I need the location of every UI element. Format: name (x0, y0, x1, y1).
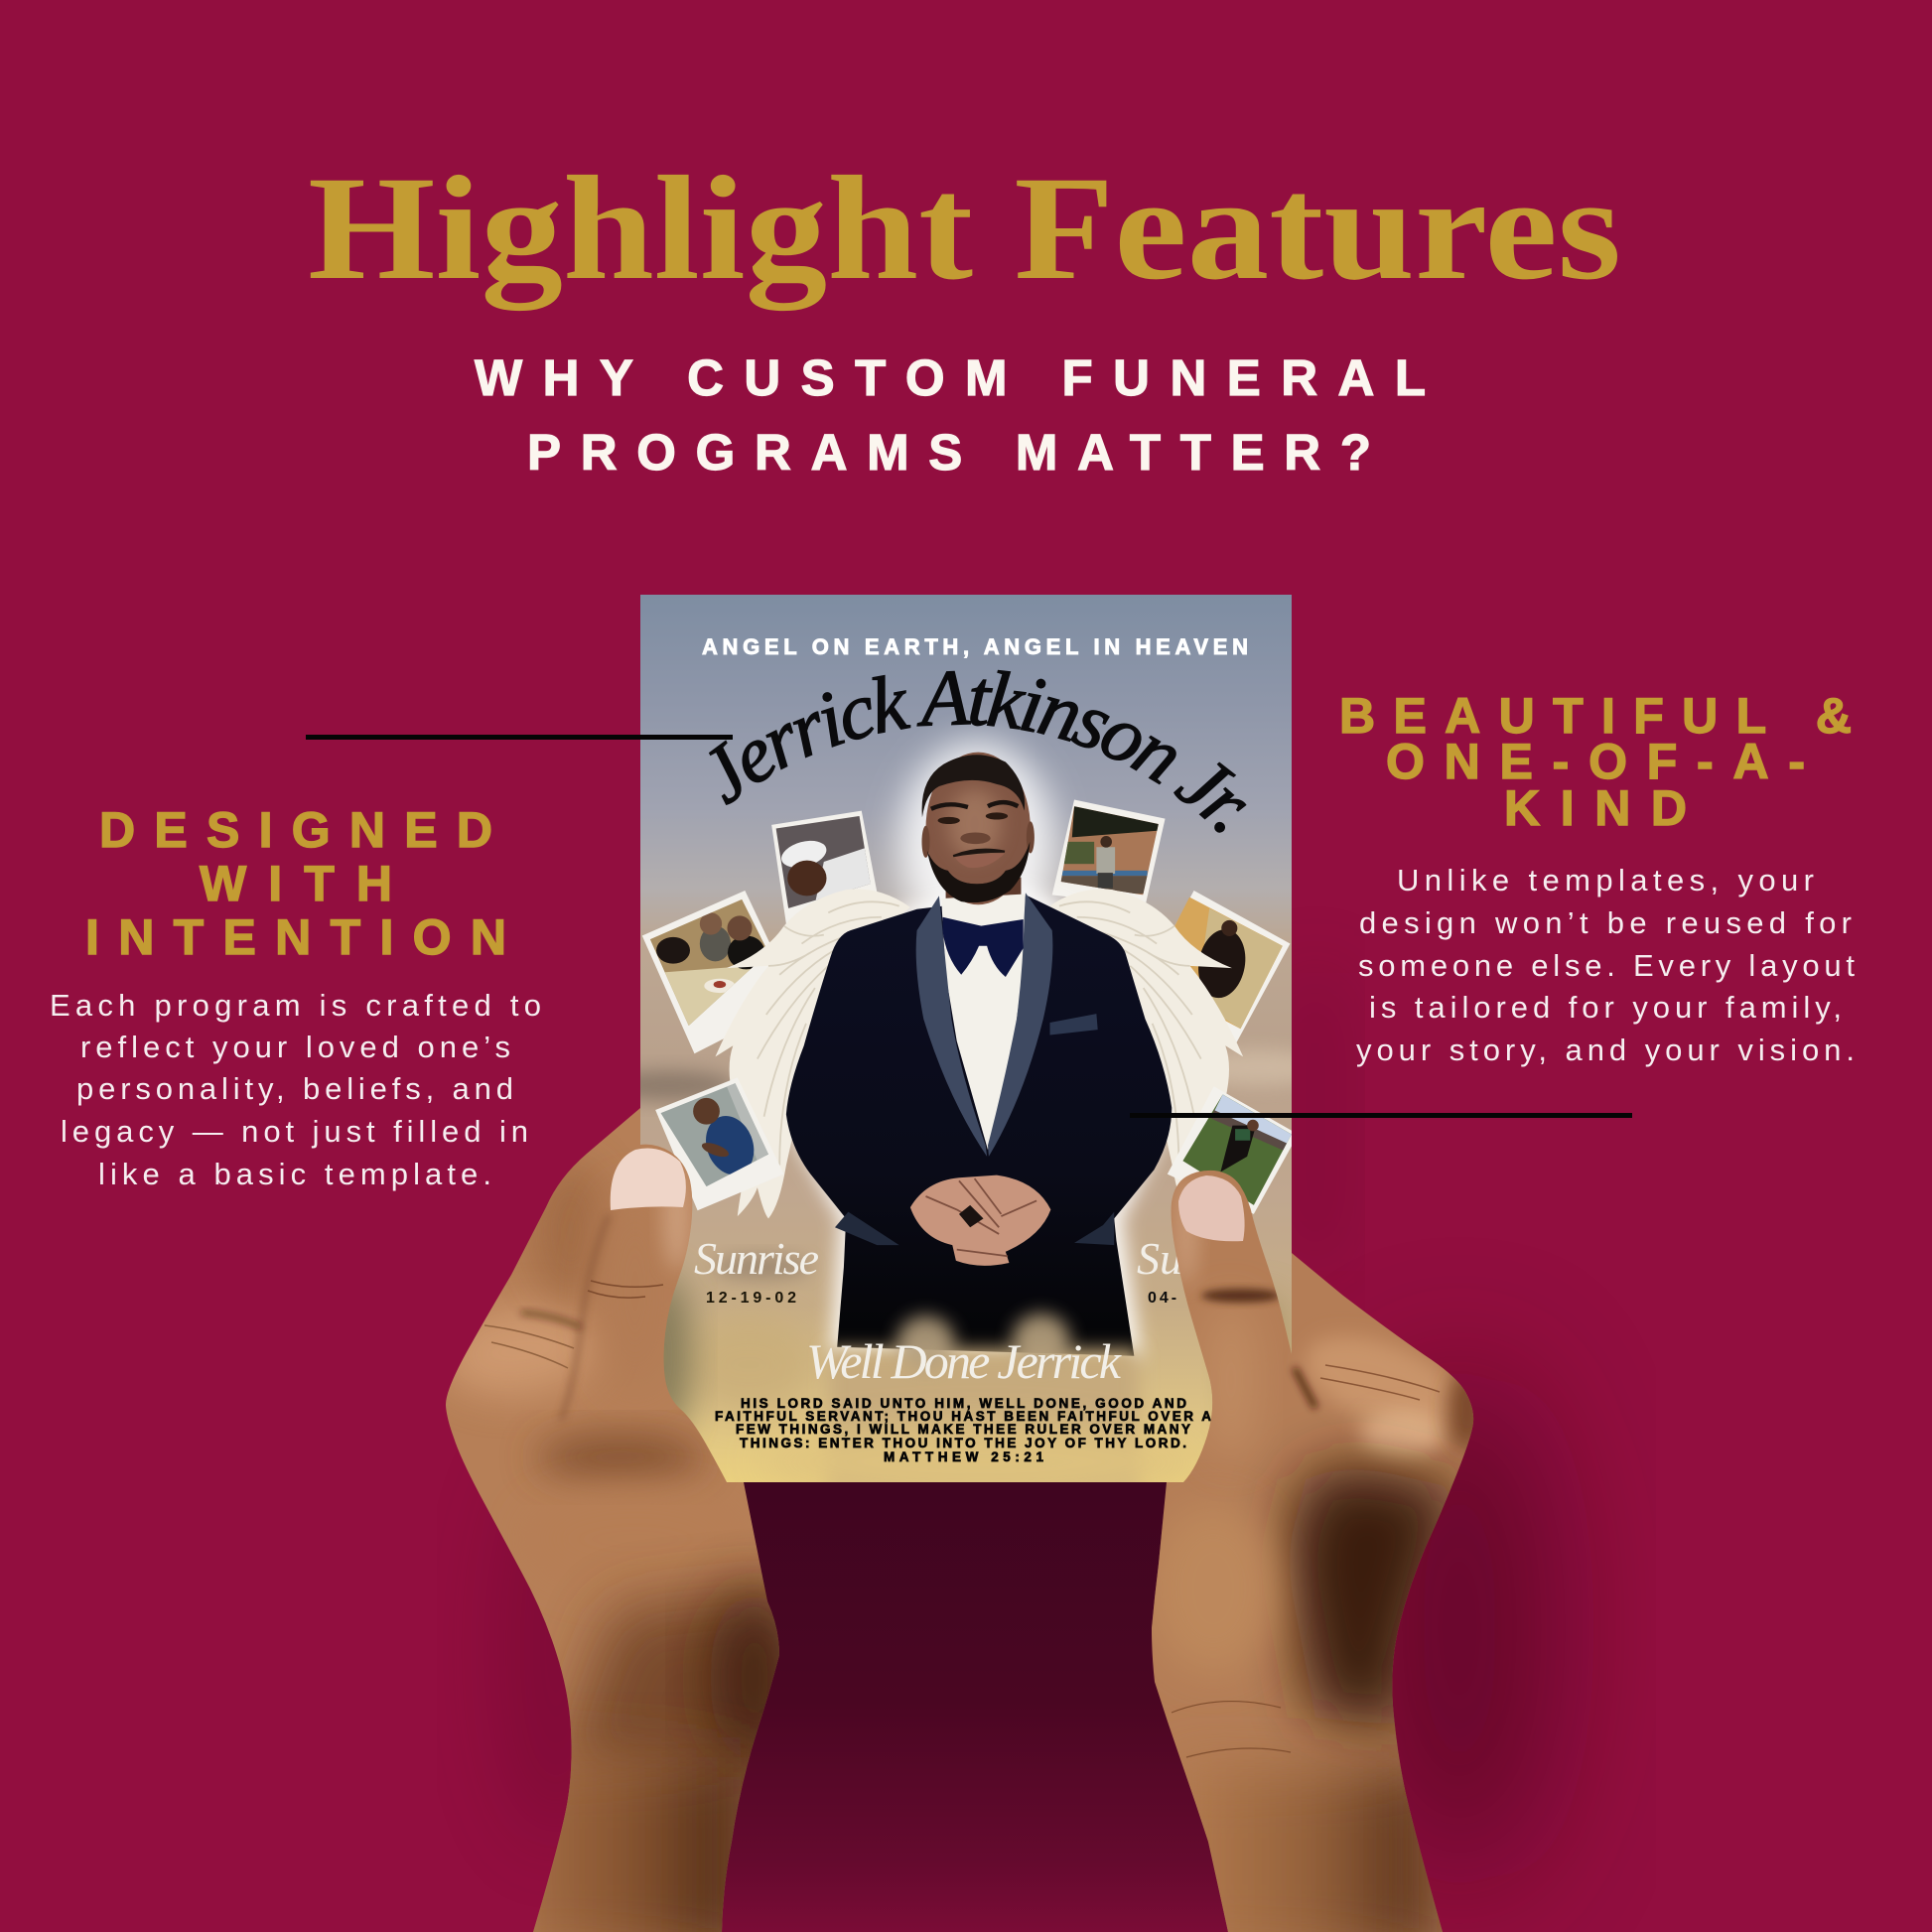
text block: designed with intention description: personality, beliefs, and (76, 1071, 513, 1106)
text block: designed with intention description: legacy — not just filled in (61, 1114, 528, 1149)
sunset label: Su (1137, 1233, 1182, 1284)
callout line left (306, 735, 733, 740)
callout line right (1130, 1113, 1632, 1118)
jacket cuffs (835, 1212, 899, 1245)
right hand (1149, 1171, 1487, 1932)
eyes (938, 817, 960, 824)
card artwork (562, 669, 1292, 1482)
text block: beautiful description: Unlike templates, your (1397, 863, 1814, 897)
well done script: Well Done Jerrick (806, 1333, 1122, 1389)
text block: designed with intention description: reflect your loved one’s (80, 1030, 510, 1064)
icon: angel wing left (715, 890, 910, 1218)
head (926, 753, 1031, 904)
text block: designed with intention description: like a basic template. (98, 1157, 491, 1191)
panel: designed with intention (50, 802, 541, 1191)
tagline: ANGEL ON EARTH, ANGEL IN HEAVEN (702, 634, 1248, 659)
text block: beautiful description: someone else. Every layout (1358, 948, 1855, 983)
mustache (953, 850, 1005, 856)
man in tuxedo (786, 753, 1172, 1356)
clasped hands (910, 1175, 1050, 1266)
pocket square (1050, 1014, 1098, 1035)
icon: left thumbnail (611, 1148, 686, 1210)
heading: beautiful and one of a kind: KIND (1504, 780, 1687, 836)
photo: man in dark coat (1174, 891, 1291, 1042)
photo: graduate on lawn (1168, 1086, 1299, 1214)
text block: designed with intention description: Each program is crafted to (50, 988, 541, 1023)
name in script (727, 725, 1229, 842)
card artwork: Jerrick Atkinson Jr. (709, 669, 1247, 833)
sunrise date: 12-19-02 (706, 1290, 796, 1307)
nose (960, 832, 991, 844)
scripture verse: FEW THINGS, I WILL MAKE THEE RULER OVER MANY (736, 1422, 1190, 1437)
photo: family at table (641, 891, 769, 1054)
subtitle (475, 349, 1426, 481)
text block: beautiful description: design won’t be reused for (1359, 905, 1852, 940)
text block: designed with intention description (50, 988, 541, 1191)
hair (922, 755, 1025, 817)
photo: chef portrait (766, 811, 882, 923)
icon: right thumbnail (1178, 1175, 1245, 1241)
panel: beautiful and one of a kind (1339, 688, 1855, 1067)
tuxedo jacket (786, 896, 1172, 1356)
clouds (603, 1050, 1329, 1453)
body glow (786, 895, 1172, 1351)
heading: designed with intention: INTENTION (85, 909, 506, 965)
bow tie (942, 917, 1024, 977)
photo: boy in blue shirt (655, 1077, 784, 1210)
icon: angel wing right (1052, 890, 1243, 1187)
scripture verse: HIS LORD SAID UNTO HIM, WELL DONE, GOOD AND (741, 1396, 1186, 1411)
subtitle: PROGRAMS MATTER? (527, 424, 1371, 481)
text block: beautiful description (1356, 863, 1855, 1067)
scripture verse (715, 1396, 1211, 1464)
text block: beautiful description: is tailored for your family, (1369, 990, 1842, 1025)
lips (955, 853, 1005, 868)
heading: designed with intention: DESIGNED (99, 802, 492, 858)
sunrise label: Sunrise (694, 1233, 819, 1284)
heading: beautiful and one of a kind: ONE-OF-A- (1386, 734, 1805, 789)
eyebrows (931, 802, 1018, 809)
text block: beautiful description: your story, and your vision. (1356, 1033, 1855, 1067)
subtitle: WHY CUSTOM FUNERAL (475, 349, 1426, 406)
drop shadow under hands and card (496, 973, 1549, 1932)
scripture verse: THINGS: ENTER THOU INTO THE JOY OF THY LORD. (740, 1436, 1186, 1450)
scripture verse: FAITHFUL SERVANT; THOU HAST BEEN FAITHFUL OVER A (715, 1409, 1211, 1424)
left lapel (916, 896, 987, 1157)
heading: beautiful and one of a kind: BEAUTIFUL & (1339, 688, 1852, 744)
scripture verse: MATTHEW 25:21 (884, 1449, 1043, 1464)
title: Highlight Features (308, 146, 1621, 311)
funeral program card (640, 595, 1292, 1482)
halo behind head (899, 742, 1054, 950)
right lapel (988, 893, 1052, 1157)
photo: man at brick wall (1052, 799, 1166, 906)
heading: beautiful and one of a kind (1339, 688, 1852, 836)
heading: designed with intention (85, 802, 506, 965)
shirt (941, 895, 1026, 1150)
beard (927, 842, 1030, 902)
sunset date: 04- (1148, 1290, 1179, 1307)
ears (921, 826, 930, 858)
cloud fade over jacket (758, 1313, 1200, 1502)
left hand (437, 1108, 799, 1932)
face highlight (948, 788, 1001, 860)
neck (946, 878, 1021, 923)
heading: designed with intention: WITH (200, 856, 392, 911)
